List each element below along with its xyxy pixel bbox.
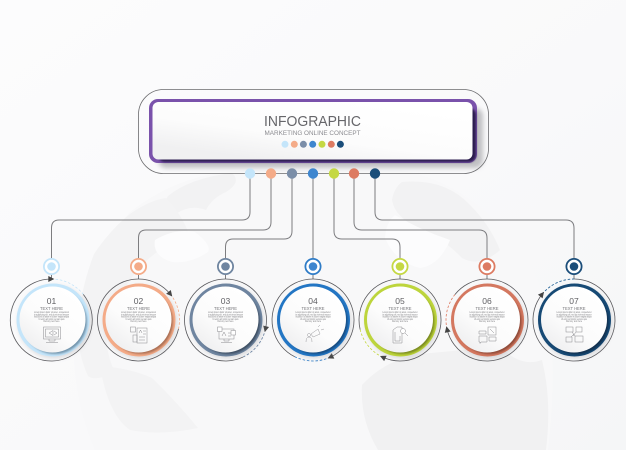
body text: to adipiscing elit, sed do eiusmod tempor	[470, 313, 505, 316]
node marker	[44, 259, 59, 279]
connector lines	[52, 174, 574, 258]
body text: Ut enim ad minim veniam quis	[387, 318, 414, 321]
coloured disc	[538, 284, 612, 358]
outer ring with dashed arc and arrow	[10, 276, 92, 361]
coloured disc	[190, 284, 264, 358]
step 03	[176, 259, 278, 370]
icon: document with magnifier	[393, 327, 408, 343]
label: TEXT HERE	[562, 306, 586, 311]
node marker	[566, 259, 582, 279]
coloured disc	[102, 284, 177, 358]
body text: Lorem ipsum dolor sit amet, consectetur	[296, 311, 331, 314]
label: TEXT HERE	[388, 306, 412, 311]
number: 02	[134, 296, 143, 306]
body text: Ut enim ad minim veniam quis	[300, 318, 327, 321]
outer ring with dashed arc and arrow	[176, 271, 278, 370]
body text	[296, 311, 331, 323]
body text: Dummy text here	[305, 320, 322, 323]
body text: incididunt ut labore et dolore magna aliqua	[121, 316, 157, 319]
icon: person with megaphone	[306, 325, 324, 342]
outer ring with dashed arc and arrow	[514, 260, 626, 378]
body text: incididunt ut labore et dolore magna aliqua	[382, 316, 418, 319]
body text	[208, 311, 244, 323]
step 02	[81, 259, 198, 378]
step 06	[435, 259, 536, 370]
body text: Dummy text here	[566, 320, 583, 323]
coloured disc	[451, 284, 526, 358]
icon: translation cards	[130, 327, 147, 343]
label: TEXT HERE	[476, 306, 499, 311]
coloured disc	[16, 284, 91, 358]
step 01	[10, 259, 92, 361]
number: 03	[221, 296, 230, 306]
body text: Dummy text here	[130, 320, 147, 323]
outer rounded frame	[138, 90, 488, 174]
body text: Ut enim ad minim veniam quis	[474, 318, 501, 321]
node marker	[218, 259, 233, 279]
body text: Lorem ipsum dolor sit amet, consectetur	[121, 311, 156, 314]
body text: to adipiscing elit, sed do eiusmod tempor	[556, 313, 592, 316]
body text	[470, 311, 505, 323]
number: 05	[395, 296, 405, 306]
body text	[556, 311, 592, 323]
body text: Dummy text here	[479, 320, 496, 323]
connector start dots	[245, 168, 380, 179]
body text	[121, 311, 157, 323]
number: 04	[308, 296, 318, 306]
step 05	[344, 259, 455, 377]
body text	[34, 311, 70, 323]
subtitle: MARKETING ONLINE CONCEPT	[264, 130, 360, 137]
coloured disc	[277, 284, 352, 358]
node marker	[131, 259, 146, 279]
coloured disc	[364, 284, 438, 358]
icon: chat cards	[479, 327, 496, 344]
body text: Lorem ipsum dolor sit amet, consectetur	[470, 311, 505, 314]
outer ring with dashed arc and arrow	[435, 271, 536, 370]
icon: monitor with video	[44, 327, 60, 342]
body text: incididunt ut labore et dolore magna aliqua	[208, 316, 244, 319]
title: INFOGRAPHIC	[264, 113, 361, 130]
number: 01	[47, 296, 56, 306]
body text: incididunt ut labore et dolore magna aliqua	[556, 316, 592, 319]
body text: to adipiscing elit, sed do eiusmod tempor	[121, 313, 156, 316]
node marker	[392, 259, 408, 279]
node marker	[305, 259, 321, 279]
body text: Lorem ipsum dolor sit amet, consectetur	[34, 311, 69, 314]
label: TEXT HERE	[40, 306, 63, 311]
outer ring with dashed arc and arrow	[81, 260, 198, 378]
body text: Dummy text here	[392, 320, 409, 323]
body text: to adipiscing elit, sed do eiusmod tempor	[382, 313, 418, 316]
body text: to adipiscing elit, sed do eiusmod tempor	[34, 313, 69, 316]
dark inner shadow	[158, 108, 476, 162]
globe map	[74, 170, 553, 450]
outer ring with dashed arc and arrow	[344, 266, 455, 377]
body text: incididunt ut labore et dolore magna aliqua	[470, 316, 505, 319]
body text: Dummy text here	[44, 320, 60, 323]
body text: incididunt ut labore et dolore magna aliqua	[34, 316, 70, 319]
outer ring with dashed arc and arrow	[259, 266, 369, 377]
body text: Ut enim ad minim veniam quis	[126, 318, 152, 321]
purple border	[149, 99, 477, 163]
body text: Lorem ipsum dolor sit amet, consectetur	[556, 311, 592, 314]
label: TEXT HERE	[127, 306, 150, 311]
body text: Dummy text here	[218, 320, 234, 323]
body text: incididunt ut labore et dolore magna aliqua	[296, 316, 331, 319]
body text	[382, 311, 418, 323]
body text: to adipiscing elit, sed do eiusmod tempor	[296, 313, 331, 316]
header panel	[138, 90, 488, 174]
panel shadow	[158, 108, 483, 168]
body text: Lorem ipsum dolor sit amet, consectetur	[208, 311, 243, 314]
body text: Ut enim ad minim veniam quis	[561, 318, 588, 321]
icon: screen with badges	[218, 327, 236, 342]
number: 06	[482, 296, 492, 306]
body text: Lorem ipsum dolor sit amet, consectetur	[382, 311, 418, 314]
label: TEXT HERE	[302, 306, 325, 311]
icon: connected chat bubbles	[566, 327, 583, 342]
colour dots	[282, 141, 344, 148]
body text: Ut enim ad minim veniam quis	[212, 318, 239, 321]
body text: Ut enim ad minim veniam quis	[38, 318, 65, 321]
step 04	[259, 259, 369, 377]
label: TEXT HERE	[214, 306, 237, 311]
node marker	[479, 259, 495, 279]
white panel	[152, 102, 472, 160]
number: 07	[569, 296, 579, 306]
body text: to adipiscing elit, sed do eiusmod tempor	[208, 313, 243, 316]
step 07	[514, 259, 626, 378]
